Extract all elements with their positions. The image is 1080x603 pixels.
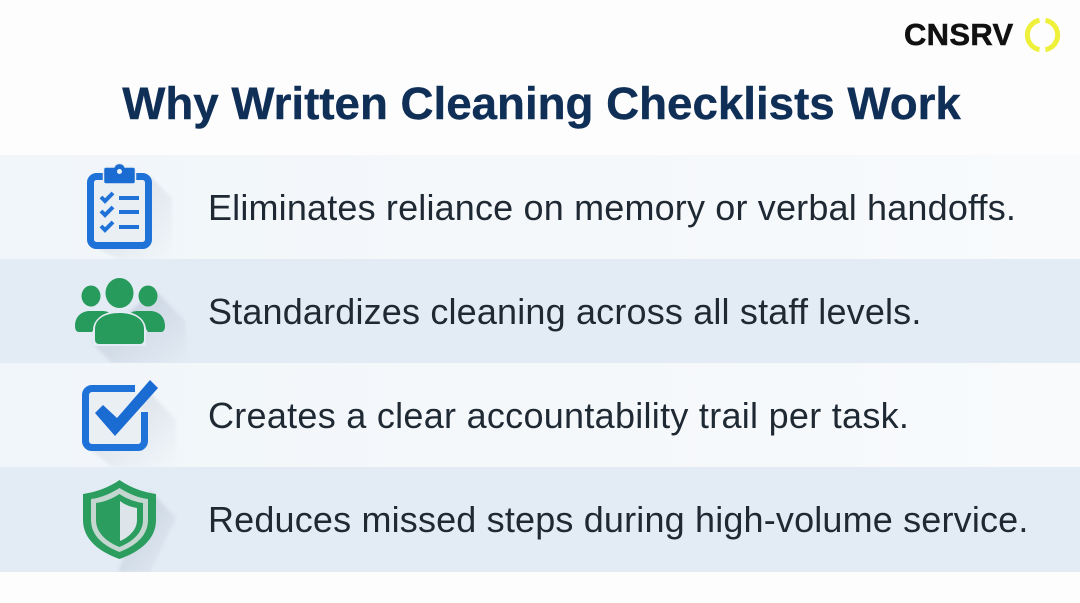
icon: shield	[83, 480, 174, 572]
text: standardizes cleaning: Standardizes cleaning across all staff levels.	[208, 291, 922, 332]
icon: checked box	[82, 380, 174, 466]
row 1: memory	[0, 155, 1080, 259]
text: eliminates reliance: Eliminates reliance on memory or verbal handoffs.	[208, 187, 1016, 228]
text: reduces missed steps: Reduces missed steps during high-volume service.	[208, 499, 1029, 540]
text: creates accountability: Creates a clear accountability trail per task.	[208, 395, 909, 436]
logo wordmark: CNSRV	[904, 17, 1013, 52]
title: Why Written Cleaning Checklists Work	[122, 78, 961, 129]
row 4: missed steps	[0, 467, 1080, 572]
logo ring	[1025, 18, 1060, 52]
icon: clipboard checklist	[87, 164, 171, 258]
icon: group of people	[75, 278, 184, 362]
logo	[904, 17, 1060, 52]
row 2: standardizes	[0, 259, 1080, 363]
row 3: accountability	[0, 363, 1080, 467]
